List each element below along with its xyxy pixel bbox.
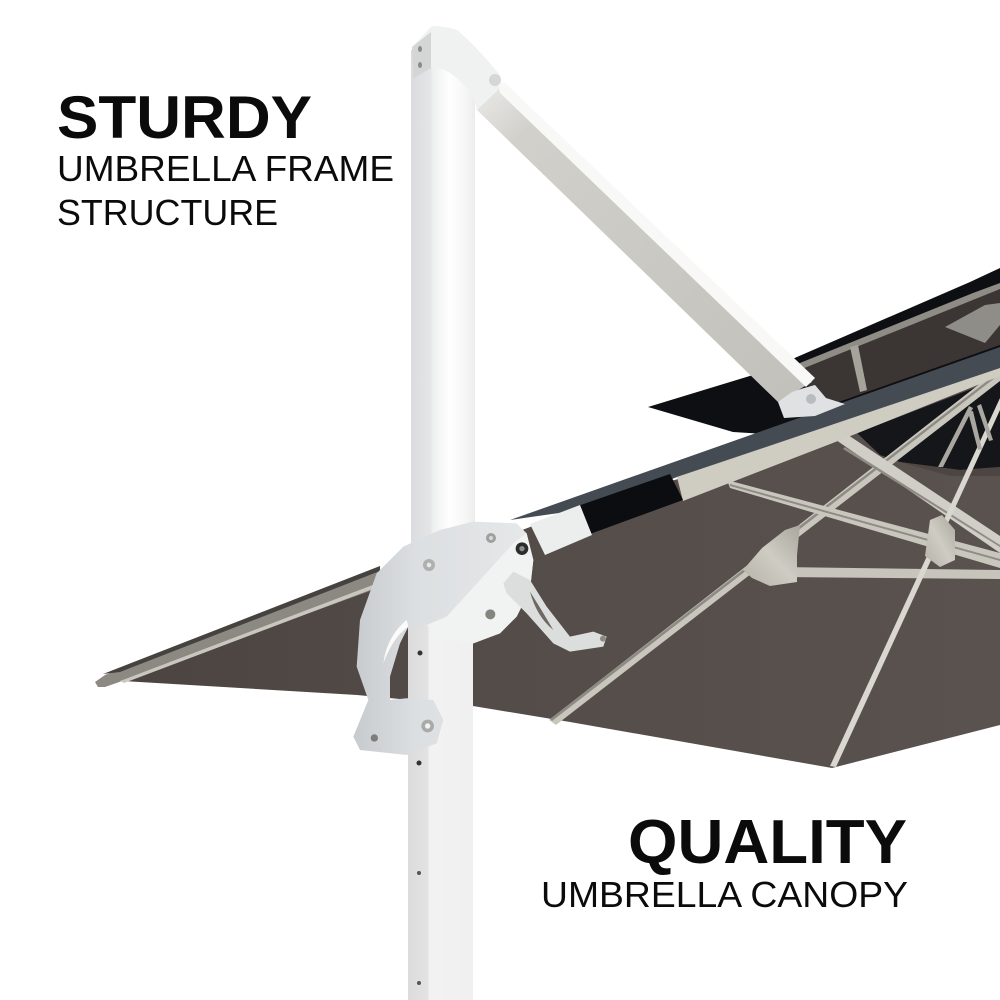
rib: fork lower: [727, 480, 1000, 568]
crank handle: [503, 572, 607, 652]
canopy left edge trim: [95, 567, 380, 687]
heading: quality: QUALITY: [628, 808, 907, 877]
brace bracket: [778, 385, 845, 418]
upper canopy layer: [648, 268, 1000, 440]
bolts: [423, 559, 435, 571]
rib: cross: [836, 435, 1000, 553]
tilt hook bracket: [353, 522, 533, 755]
fabric bunch right: [925, 515, 955, 567]
rib: steep: [830, 398, 1000, 767]
fabric bunch left: [743, 525, 800, 586]
rib: long diagonal: [549, 368, 1000, 725]
brace arm: [477, 82, 845, 418]
subheading: umbrella frame structure: [57, 148, 394, 233]
main arm: [510, 347, 1000, 555]
heading: sturdy: [57, 84, 394, 233]
main canopy underside: [95, 375, 1000, 768]
subheading: umbrella canopy: UMBRELLA CANOPY: [541, 874, 908, 915]
canopy ribs: [549, 368, 1000, 767]
subheading: umbrella frame structure: UMBRELLA FRAME: [57, 148, 394, 189]
small struts: [938, 406, 973, 467]
pole: [408, 50, 475, 1000]
pole head: [412, 26, 501, 110]
heading: quality: [541, 808, 908, 915]
rib: horizontal: [780, 567, 1000, 579]
subheading: umbrella frame structure: STRUCTURE: [57, 192, 278, 233]
pole holes: [418, 650, 422, 656]
heading: sturdy: STURDY: [57, 84, 312, 151]
